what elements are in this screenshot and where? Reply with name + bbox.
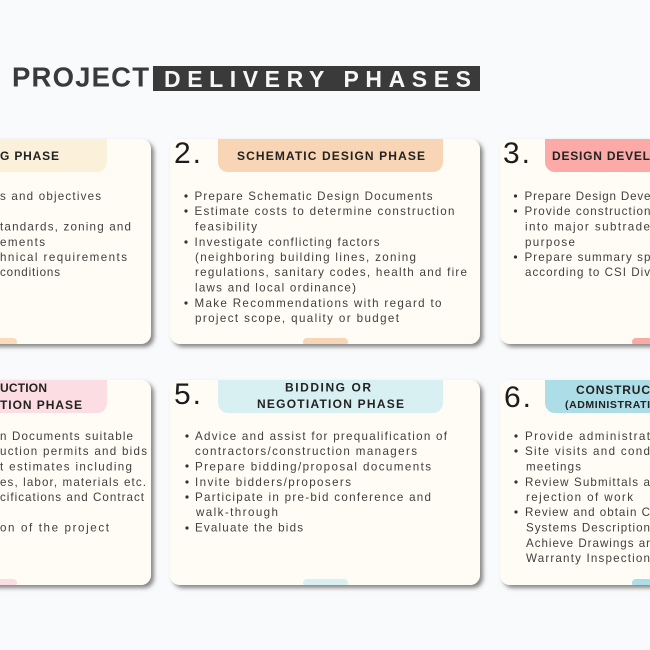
phase 3 bullet text: Provide construction	[524, 205, 650, 218]
title banner: DELIVERY PHASES: DELIVERY PHASES	[164, 66, 471, 92]
phase 2 bullet text: regulations, sanitary codes, health and fire	[195, 266, 467, 279]
phase 2 bullet text: laws and local ordinance)	[195, 282, 356, 294]
phase 1 bullet text: tandards, zoning and	[0, 220, 131, 234]
panel: phase 6	[500, 380, 650, 587]
phase 5 bullet text: Participate in pre-bid conference and	[195, 491, 431, 504]
phase 5 bullet text	[185, 430, 448, 534]
phase 6 bullet text: Systems Description	[526, 522, 650, 534]
phase 4 heading tab	[0, 380, 107, 413]
phase 2 bullet text: Make Recommendations with regard to	[194, 297, 442, 310]
phase 6 bullet text: Site visits and cond	[525, 445, 650, 458]
phase 5 heading tab: NEGOTIATION PHASE	[257, 397, 404, 411]
phase 1 bullet text: ements	[0, 236, 45, 249]
phase 5 bottom marker	[303, 579, 348, 585]
phase 3 heading tab: DESIGN DEVEL	[552, 149, 650, 163]
phase 4 heading tab: UCTION	[0, 381, 47, 395]
phase 3 bullet text: purpose	[525, 236, 575, 249]
phase 1 bullet text	[0, 190, 131, 279]
phase 3 bullet text	[514, 190, 650, 279]
phase 2 heading tab	[218, 139, 443, 172]
phase 4 bullet text: cifications and Contract	[0, 491, 145, 504]
phase 6 heading tab: CONSTRUC	[576, 383, 650, 397]
panel: phase 4	[0, 380, 151, 587]
phase 3 heading tab	[545, 139, 650, 172]
phase 4 bullet text: uction permits and bids	[0, 445, 147, 458]
phase 1 heading tab	[0, 139, 107, 172]
phase 5 bullet text: Advice and assist for prequalification of	[195, 430, 448, 443]
phase 5 bullet text: walk-through	[195, 506, 278, 519]
panel: phase 1	[0, 139, 151, 346]
phase 2 bullet text: feasibility	[195, 220, 257, 234]
phase 4 bottom marker	[0, 579, 17, 585]
phase 2 bullet text: (neighboring building lines, zoning	[195, 251, 416, 264]
phase 6 bullet text: Provide administrat	[525, 430, 650, 443]
panel: phase 3	[500, 137, 650, 346]
phase 2 bullet text	[184, 190, 467, 325]
phase 5 heading tab	[218, 380, 443, 413]
phase 6 number: 6.	[504, 381, 531, 414]
phase 2 bottom marker	[303, 338, 348, 344]
phase 6 heading tab: (ADMINISTRATI	[565, 399, 650, 411]
panel: phase 2	[170, 137, 480, 346]
phase 4 bullet text	[0, 430, 147, 534]
phase 3 bullet text: Prepare Design Deve	[524, 190, 650, 203]
phase 2 heading tab: SCHEMATIC DESIGN PHASE	[237, 149, 425, 163]
phase 5 bullet text: Evaluate the bids	[195, 522, 303, 534]
phase 1 bullet text: conditions	[0, 266, 60, 279]
phase 6 bullet text: Review Submittals a	[525, 476, 650, 489]
phase 4 bullet text: n Documents suitable	[0, 430, 133, 443]
phase 5 bullet text: contractors/construction managers	[195, 445, 417, 458]
phase 6 bullet text: meetings	[526, 460, 581, 474]
phase 6 bullet text: rejection of work	[526, 491, 633, 504]
phase 3 bullet text: Prepare summary sp	[524, 251, 650, 264]
phase 2 bullet text: Prepare Schematic Design Documents	[194, 190, 433, 203]
panel: phase 5	[170, 378, 480, 587]
phase 3 bullet text: according to CSI Div	[525, 266, 650, 279]
title	[12, 62, 480, 92]
phase 4 bullet text: es, labor, materials etc.	[0, 476, 146, 489]
phase 1 bottom marker	[0, 338, 17, 344]
phase 6 bullet text	[514, 430, 650, 565]
phase 6 bottom marker	[632, 579, 650, 585]
phase 4 bullet text: t estimates including	[0, 460, 132, 474]
phase 2 bullet text: project scope, quality or budget	[195, 312, 400, 325]
phase 5 bullet text: Prepare bidding/proposal documents	[195, 460, 431, 474]
phase 5 heading tab: BIDDING OR	[285, 380, 371, 394]
title word: PROJECT: PROJECT	[12, 62, 149, 92]
phase 3 bullet text: into major subtrade	[525, 220, 650, 234]
phase 1 bullet text: s and objectives	[0, 190, 101, 203]
phase 6 heading tab	[545, 380, 650, 413]
phase 1 bullet text: hnical requirements	[0, 251, 127, 264]
phase 4 bullet text: on of the project	[0, 522, 110, 534]
phase 5 bullet text: Invite bidders/proposers	[195, 476, 351, 489]
phase 6 bullet text: Review and obtain C	[525, 506, 650, 519]
phase 6 bullet text: Warranty Inspection	[526, 552, 650, 565]
phase 1 heading tab: G PHASE	[0, 149, 59, 163]
phase 3 bottom marker	[632, 338, 650, 344]
phase 2 bullet text: Investigate conflicting factors	[194, 236, 380, 249]
phase 3 number: 3.	[503, 137, 530, 170]
phase 2 number: 2.	[174, 137, 201, 170]
phase 6 bullet text: Achieve Drawings ar	[526, 537, 650, 550]
phase 5 number: 5.	[174, 378, 201, 411]
phase 4 heading tab: TION PHASE	[0, 398, 82, 412]
phase 2 bullet text: Estimate costs to determine construction	[194, 205, 454, 218]
